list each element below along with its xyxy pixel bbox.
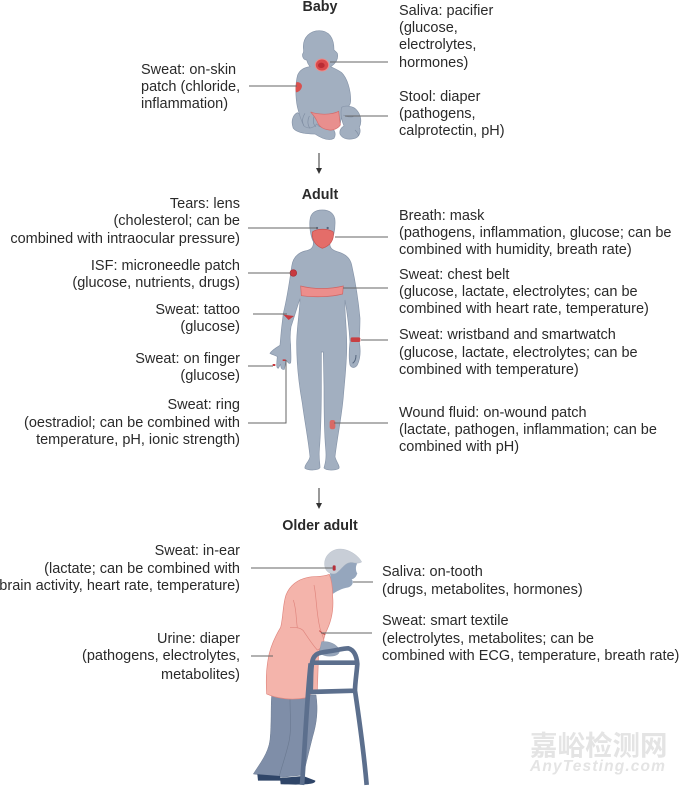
text: urine: metabolites) (161, 667, 240, 683)
text: chest belt (399, 267, 649, 317)
text: baby stool: (pathogens, (399, 106, 476, 122)
text: tattoo (155, 302, 240, 335)
text: ISF (72, 258, 240, 291)
text: smart textile: Sweat: smart textile (382, 613, 509, 629)
text: tattoo: (glucose) (180, 319, 240, 335)
text: baby patch: Sweat: on-skin (141, 62, 236, 78)
text: wristband: combined with temperature) (399, 362, 579, 378)
text: baby patch (141, 62, 240, 112)
text: in-ear: (lactate; can be combined with (44, 561, 240, 577)
text: on-tooth: (drugs, metabolites, hormones) (382, 582, 583, 598)
text: baby pacifier: (glucose, (399, 20, 458, 36)
watermark (529, 730, 668, 775)
text: ring (24, 397, 240, 448)
text: wound: combined with pH) (399, 439, 519, 455)
text: tears: combined with intraocular pressure) (10, 231, 240, 247)
text: breath (399, 208, 671, 258)
text: baby pacifier: electrolytes, (399, 37, 476, 53)
text: finger: Sweat: on finger (135, 351, 240, 367)
text: breath: Breath: mask (399, 208, 485, 224)
text: in-ear: brain activity, heart rate, temperature) (0, 578, 240, 594)
text: ring: (oestradiol; can be combined with (24, 415, 240, 431)
on-skin patch (296, 82, 302, 92)
text: wound (399, 405, 657, 455)
text: in-ear: Sweat: in-ear (155, 543, 240, 559)
text: smart textile (382, 613, 679, 664)
text: wound: (lactate, pathogen, inflammation; can be (399, 422, 657, 438)
watermark: AnyTesting.com (529, 758, 666, 775)
text: smart textile: (electrolytes, metabolites; can be (382, 631, 594, 647)
text: wristband: Sweat: wristband and smartwatch (399, 327, 616, 343)
walker (302, 648, 367, 785)
text: on-tooth: Saliva: on-tooth (382, 564, 483, 580)
leader lines: adult (248, 228, 388, 423)
in-ear sensor (333, 565, 336, 571)
hair (325, 549, 362, 574)
chest belt (301, 286, 343, 297)
text: breath: combined with humidity, breath rate) (399, 242, 632, 258)
tattoo (283, 315, 294, 320)
heading: Adult: Adult (302, 187, 338, 203)
text: smart textile: combined with ECG, temperature, breath rate) (382, 648, 679, 664)
baby body and head (296, 31, 351, 128)
coat (266, 574, 333, 699)
mask (312, 229, 333, 248)
text: baby stool: Stool: diaper (399, 89, 481, 105)
text: ISF: (glucose, nutrients, drugs) (72, 275, 240, 291)
text: chest belt: combined with heart rate, temperature) (399, 301, 649, 317)
text: chest belt: (glucose, lactate, electrolytes; can be (399, 284, 638, 300)
arrow: baby to adult (316, 153, 322, 174)
coat sleeve (290, 585, 324, 650)
trousers (253, 695, 317, 777)
text: chest belt: Sweat: chest belt (399, 267, 509, 283)
text: baby pacifier (399, 3, 493, 71)
illustration: adult (270, 210, 360, 470)
text: tears: (cholesterol; can be (113, 213, 240, 229)
text: baby stool (399, 89, 505, 139)
text: baby pacifier: Saliva: pacifier (399, 3, 493, 19)
heading: Older adult: Older adult (282, 518, 358, 534)
microneedle patch (290, 270, 297, 276)
text: wound: Wound fluid: on-wound patch (399, 405, 587, 421)
hand (319, 642, 339, 656)
text: urine: Urine: diaper (157, 631, 240, 647)
text: wristband (399, 327, 638, 378)
ring and finger sensor (273, 359, 286, 366)
text: finger (135, 351, 240, 384)
text: tears: Tears: lens (170, 196, 240, 212)
text: urine (82, 631, 240, 683)
wound patch (330, 420, 335, 429)
text: breath: (pathogens, inflammation, glucose; can be (399, 225, 671, 241)
baby right knee and foot (340, 106, 361, 139)
text: in-ear (0, 543, 240, 594)
text: tattoo: Sweat: tattoo (155, 302, 240, 318)
text: baby stool: calprotectin, pH) (399, 123, 505, 139)
text: ring: Sweat: ring (167, 397, 240, 413)
watermark: 嘉峪检测网 (530, 730, 668, 761)
arrow: adult to older adult (316, 488, 322, 509)
illustration: older adult (253, 549, 367, 785)
diaper (311, 111, 340, 130)
wristband (351, 337, 360, 342)
text: on-tooth (382, 564, 583, 598)
text: finger: (glucose) (180, 368, 240, 384)
illustration: baby (292, 31, 361, 140)
head (329, 560, 357, 594)
text: baby pacifier: hormones) (399, 55, 468, 71)
text: baby patch: inflammation) (141, 96, 228, 112)
text: wristband: (glucose, lactate, electrolytes; can be (399, 345, 638, 361)
text: ring: temperature, pH, ionic strength) (36, 432, 240, 448)
pacifier (315, 59, 329, 71)
text: urine: (pathogens, electrolytes, (82, 648, 240, 664)
smart textile mark (319, 631, 325, 635)
text: baby patch: patch (chloride, (141, 79, 240, 95)
shoes (257, 774, 315, 785)
baby left leg (292, 113, 335, 140)
leader lines: older adult (251, 568, 373, 656)
text: ISF: ISF: microneedle patch (91, 258, 240, 274)
leader lines: baby (249, 62, 388, 116)
text: tears (10, 196, 240, 247)
